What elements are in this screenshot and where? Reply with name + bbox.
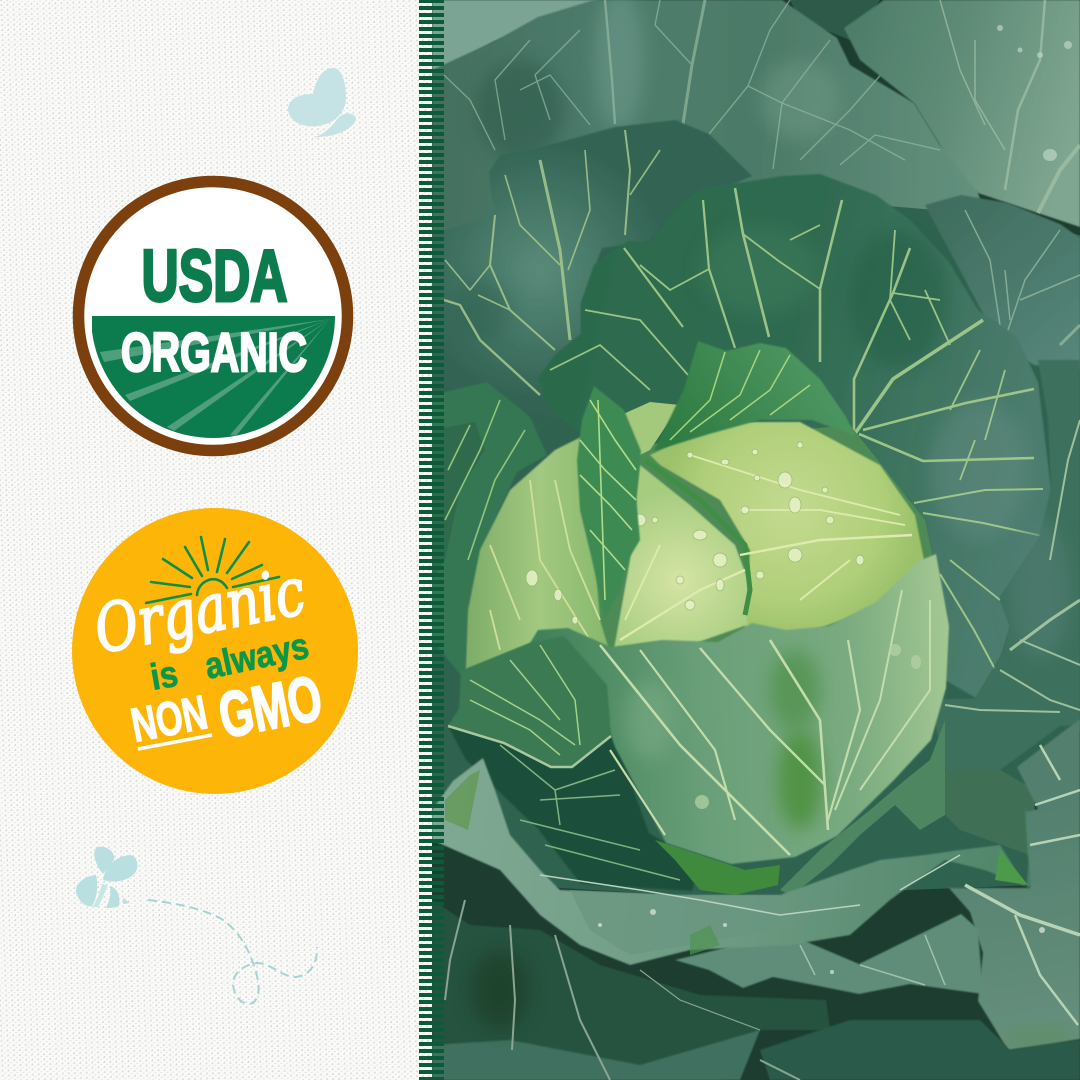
spear leaf	[577, 386, 641, 618]
word is: is	[147, 653, 181, 698]
panel: woven linen background	[0, 0, 432, 1080]
inner small leaf	[654, 341, 855, 451]
back leaf top right	[844, 0, 1080, 227]
word GMO: GMO	[213, 661, 328, 752]
NON underline	[138, 735, 212, 749]
seal word ORGANIC: ORGANIC	[121, 321, 307, 383]
seal green field	[92, 316, 335, 438]
outer left leaf beside head	[432, 382, 547, 680]
decorative stripe border	[419, 0, 444, 1080]
underlay: mid green behind the centre leaves	[432, 195, 1080, 895]
top cap behind the small leaf	[624, 402, 678, 455]
cabbage head upper wedges	[465, 402, 945, 690]
icon: sun	[146, 537, 279, 603]
icon: butterfly	[288, 68, 356, 138]
middle lower leaf	[675, 914, 983, 994]
dark fold under the head	[448, 726, 700, 891]
back leaf pale top left	[432, 0, 600, 75]
word NON: NON	[127, 686, 212, 753]
right wedge	[650, 422, 925, 635]
left lower fold	[448, 636, 611, 767]
badge: USDA Organic seal	[78, 182, 348, 450]
seal word USDA: USDA	[142, 236, 288, 317]
back leaf top	[432, 0, 990, 240]
badge: Organic is always Non GMO	[72, 508, 358, 794]
lower right leaf	[949, 719, 1080, 1052]
bottom dark leaves	[432, 900, 1080, 1080]
script word Organic: Organic	[88, 553, 311, 669]
icon: bee	[76, 847, 137, 908]
big wrap leaf	[432, 758, 1045, 974]
word always: always	[201, 625, 312, 687]
left wedge	[465, 436, 608, 669]
right leaf lower	[930, 360, 1080, 790]
centre fold leaves at the base	[655, 720, 1035, 895]
centre wedge	[612, 465, 748, 660]
head underlay	[580, 425, 945, 650]
main leaf	[538, 174, 1051, 698]
photo: cabbage in a field	[432, 0, 1080, 1080]
lower head leaf	[461, 554, 949, 864]
right leaf	[925, 195, 1080, 370]
left leaf	[432, 120, 752, 420]
flight trail	[148, 900, 317, 1004]
